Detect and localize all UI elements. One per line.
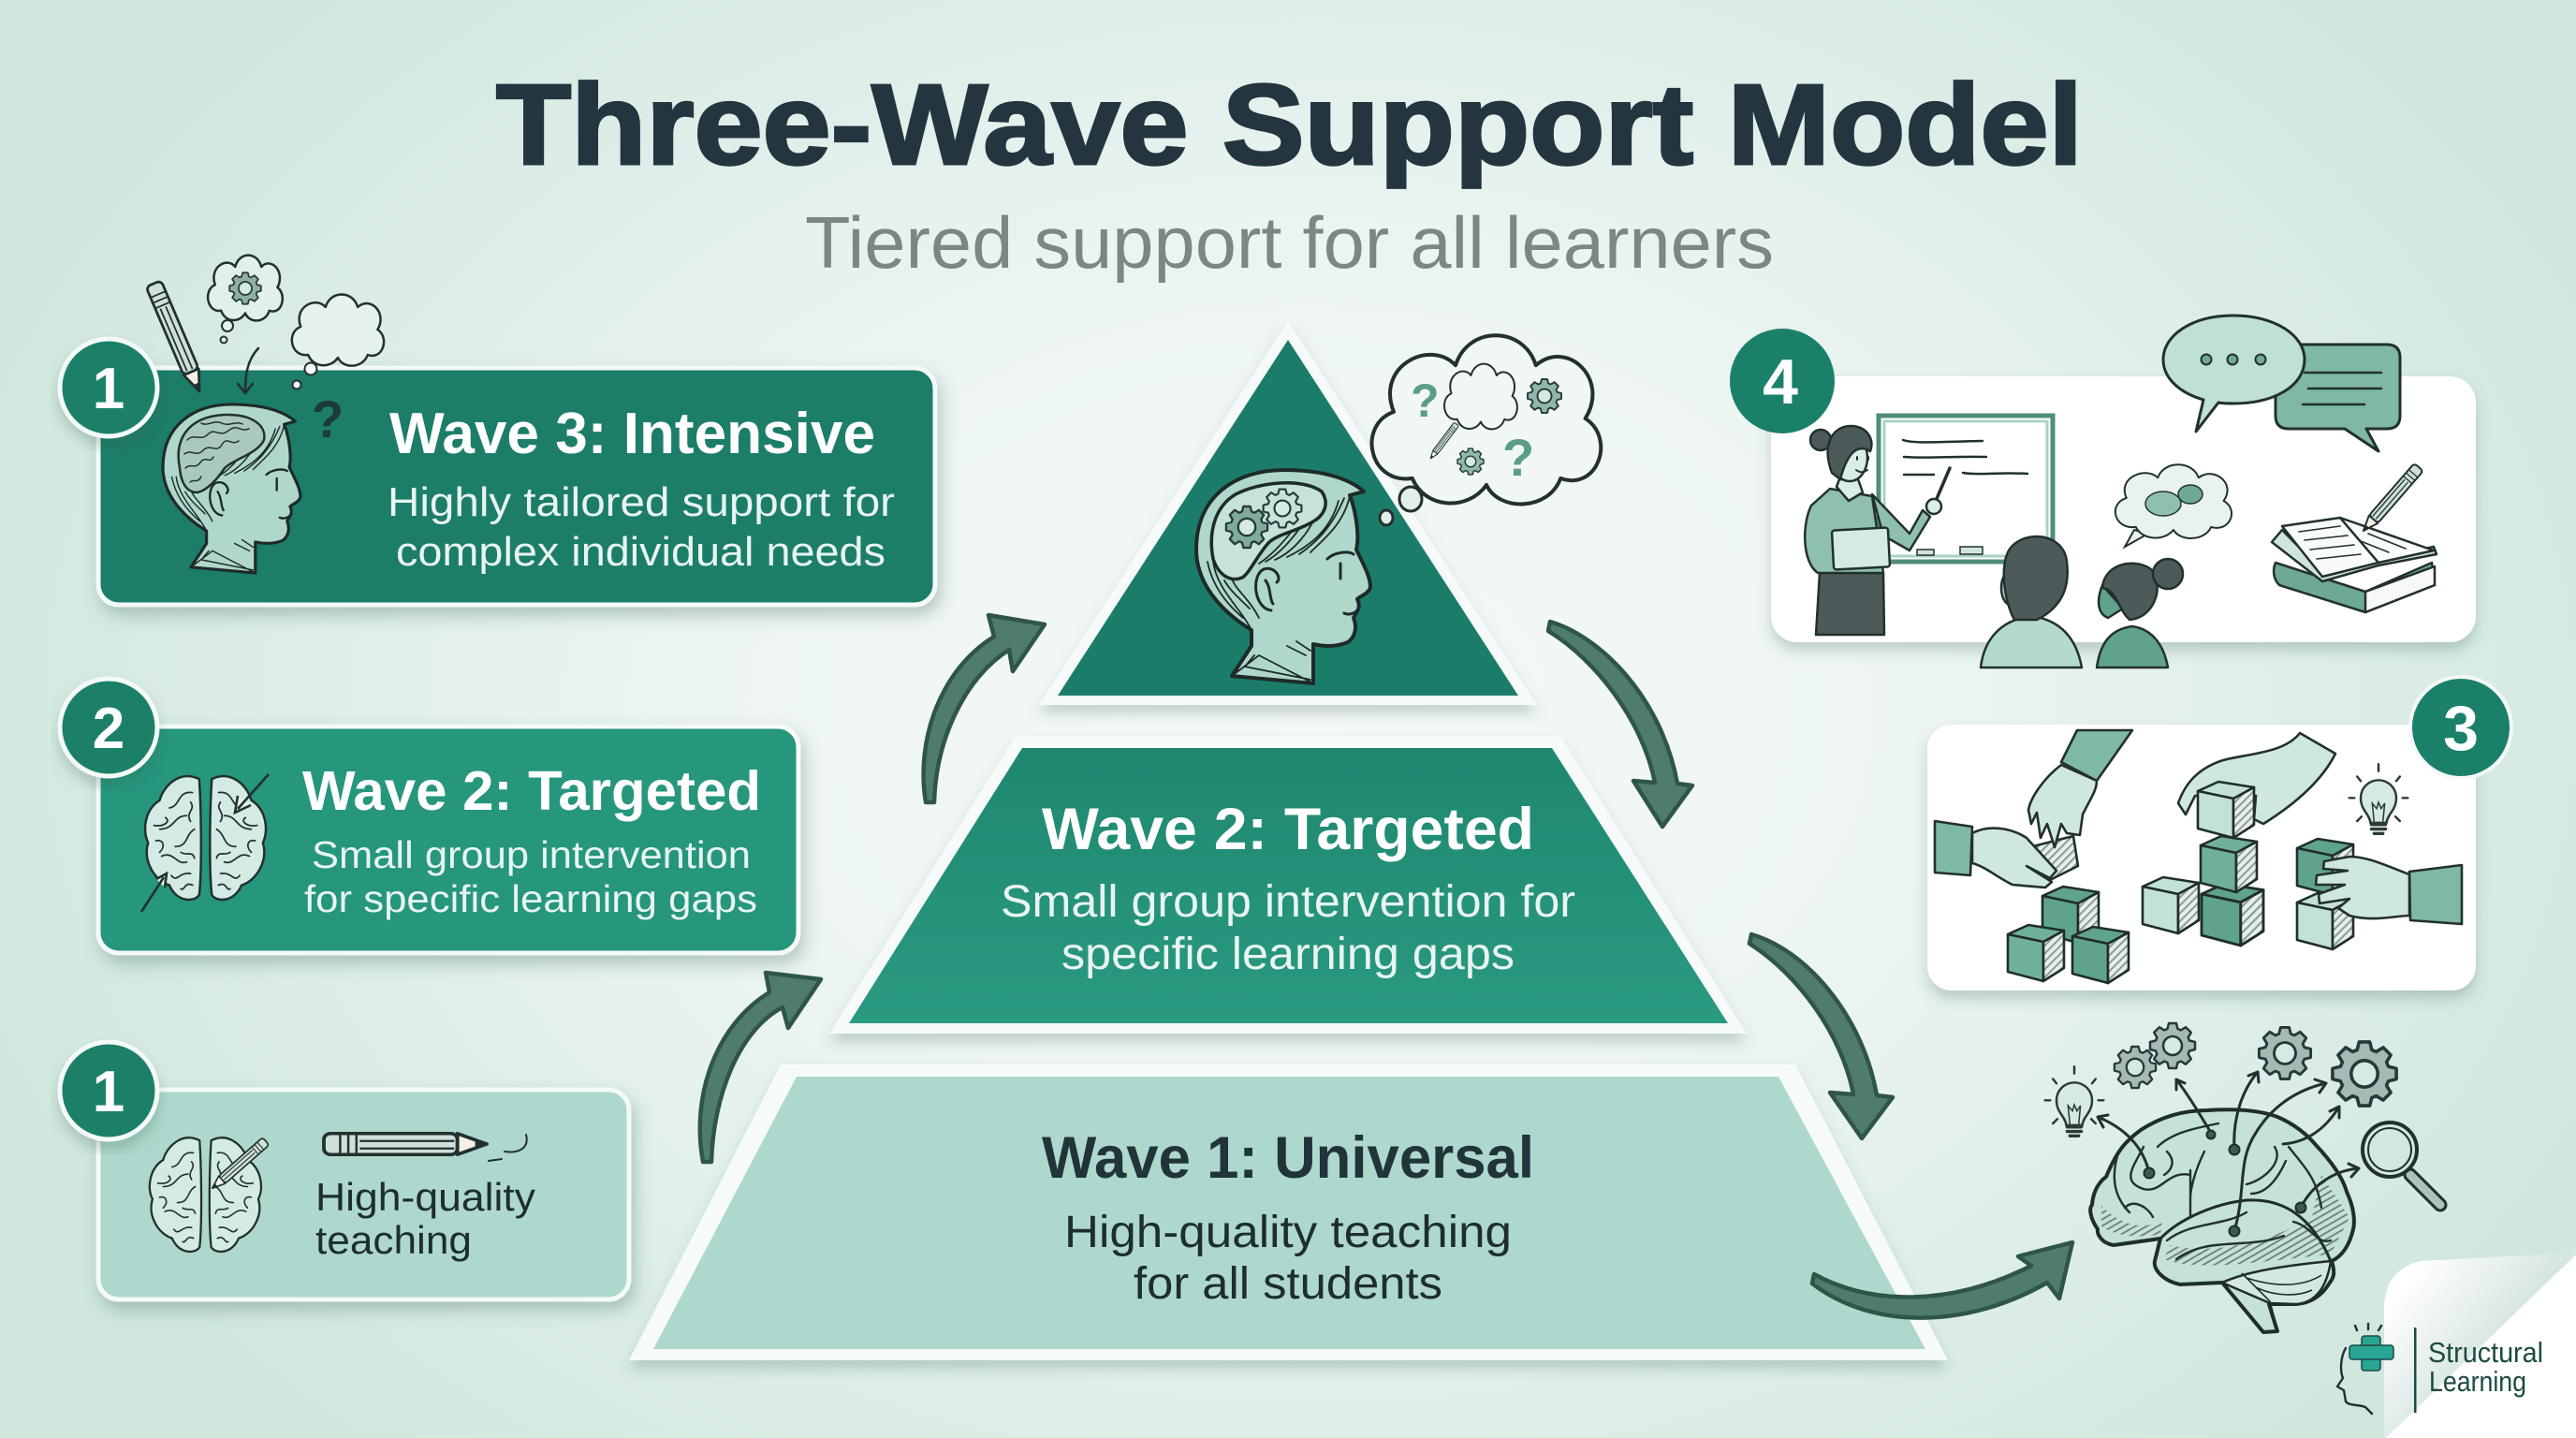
icon: thought cloud: ?: [1502, 428, 1534, 487]
badge: 1 top: [60, 339, 157, 436]
icon: hands: [1935, 730, 2462, 924]
badge: 3: [2410, 677, 2511, 778]
arrow: wave 1 to wave 2: [700, 973, 821, 1162]
icon: gear cloud: [208, 256, 283, 343]
icon: teacher: [1805, 426, 1950, 635]
icon: empty thought cloud: [292, 294, 384, 389]
tier heading: Wave 1: Universal: [1042, 1125, 1534, 1191]
title: Three-Wave Support Model: [496, 61, 2083, 188]
icon: blocks right: [2297, 839, 2353, 949]
icon: brain with idea arrows: [2090, 1072, 2359, 1332]
page curl: [2384, 1253, 2576, 1438]
tier text: for all students: [1134, 1259, 1442, 1309]
badge: 4: 4: [1763, 346, 1798, 418]
panel text: [304, 833, 757, 920]
icon: students: [1981, 536, 2183, 668]
icon: light bulb: [2349, 764, 2408, 833]
panel heading: Wave 2: Targeted: [302, 760, 761, 822]
icon: writing pencil: [2359, 463, 2423, 535]
icon: small arrow: [238, 348, 258, 393]
tier text: [1064, 1208, 1512, 1309]
icon: speech cloud: [2115, 464, 2232, 547]
pyramid tier: wave 1: [629, 1064, 1948, 1360]
icon: chat bubble with dots: [2163, 315, 2400, 451]
panel: wave 2 targeted: [98, 726, 798, 953]
icon: blocks left: [2008, 887, 2129, 983]
logo cross: [2349, 1336, 2393, 1371]
panel text: [388, 479, 895, 575]
icon: question mark: ?: [312, 389, 344, 448]
icon: thought cloud: ?: [1411, 374, 1440, 427]
icon: boy with brain: [163, 404, 300, 573]
idea arrows: [2098, 1072, 2359, 1231]
panel text: teaching: [315, 1218, 472, 1262]
icon: boy with gears: [1196, 470, 1370, 683]
panel text: High-quality: [315, 1175, 535, 1219]
icon: magnifier: [2363, 1123, 2440, 1205]
logo text: Learning: [2429, 1365, 2526, 1398]
badge: 4: [1730, 329, 1835, 433]
badge: 2: [60, 679, 157, 776]
panel: wave 1 universal: [98, 1090, 629, 1299]
panel: building blocks card: [1927, 725, 2476, 990]
arrow: wave 3 down: [1548, 622, 1692, 827]
arrow: wave 2 to wave 3: [924, 615, 1045, 802]
logo text: Structural: [2428, 1336, 2543, 1369]
icon: hand above tower: [2178, 733, 2335, 824]
panel text: Highly tailored support for: [388, 479, 895, 525]
panel text: Small group intervention: [312, 833, 751, 876]
panel heading: Wave 3: Intensive: [389, 402, 875, 466]
tier text: High-quality teaching: [1064, 1208, 1512, 1257]
pyramid tier: wave 2: [829, 736, 1747, 1034]
logo head: [2337, 1324, 2381, 1414]
icon: books: [2272, 518, 2437, 612]
panel text: for specific learning gaps: [304, 877, 757, 920]
tier text: [1001, 877, 1575, 979]
panel text: [315, 1175, 535, 1262]
icon: idea bulb: [2045, 1066, 2103, 1136]
subtitle: Tiered support for all learners: [805, 201, 1774, 284]
badge: 1 bottom: [60, 1042, 157, 1139]
tier text: specific learning gaps: [1061, 930, 1515, 979]
badge: 1 top: 1: [93, 357, 124, 421]
panel text: complex individual needs: [396, 529, 886, 575]
icon: brain with arrows: [141, 774, 269, 912]
icon: long pencil: [324, 1134, 527, 1161]
logo text: [2428, 1336, 2543, 1398]
badge: 3: 3: [2443, 693, 2479, 764]
badge: 2: 2: [93, 697, 124, 761]
arrow: wave 2 down: [1749, 934, 1893, 1138]
panel: classroom card: [1771, 315, 2476, 668]
logo: structural learning: [2337, 1324, 2543, 1414]
logo divider: [2414, 1328, 2417, 1413]
node dots: [2144, 1131, 2306, 1236]
icon: brain with pencil: [150, 1137, 270, 1252]
icon: pencil: [146, 281, 207, 394]
tier text: Small group intervention for: [1001, 877, 1575, 927]
icon: whiteboard: [1879, 416, 2053, 562]
icon: gears cluster: [2115, 1023, 2396, 1106]
panel: wave 3 intensive: [98, 256, 935, 605]
tier heading: Wave 2: Targeted: [1042, 797, 1534, 862]
badge: 1 bottom: 1: [93, 1060, 124, 1124]
arrow: wave 1 to brain: [1812, 1242, 2072, 1318]
pyramid tier: wave 3: [1039, 321, 1601, 705]
icon: thought cloud: [1372, 335, 1601, 525]
icon: blocks middle: [2143, 782, 2263, 946]
